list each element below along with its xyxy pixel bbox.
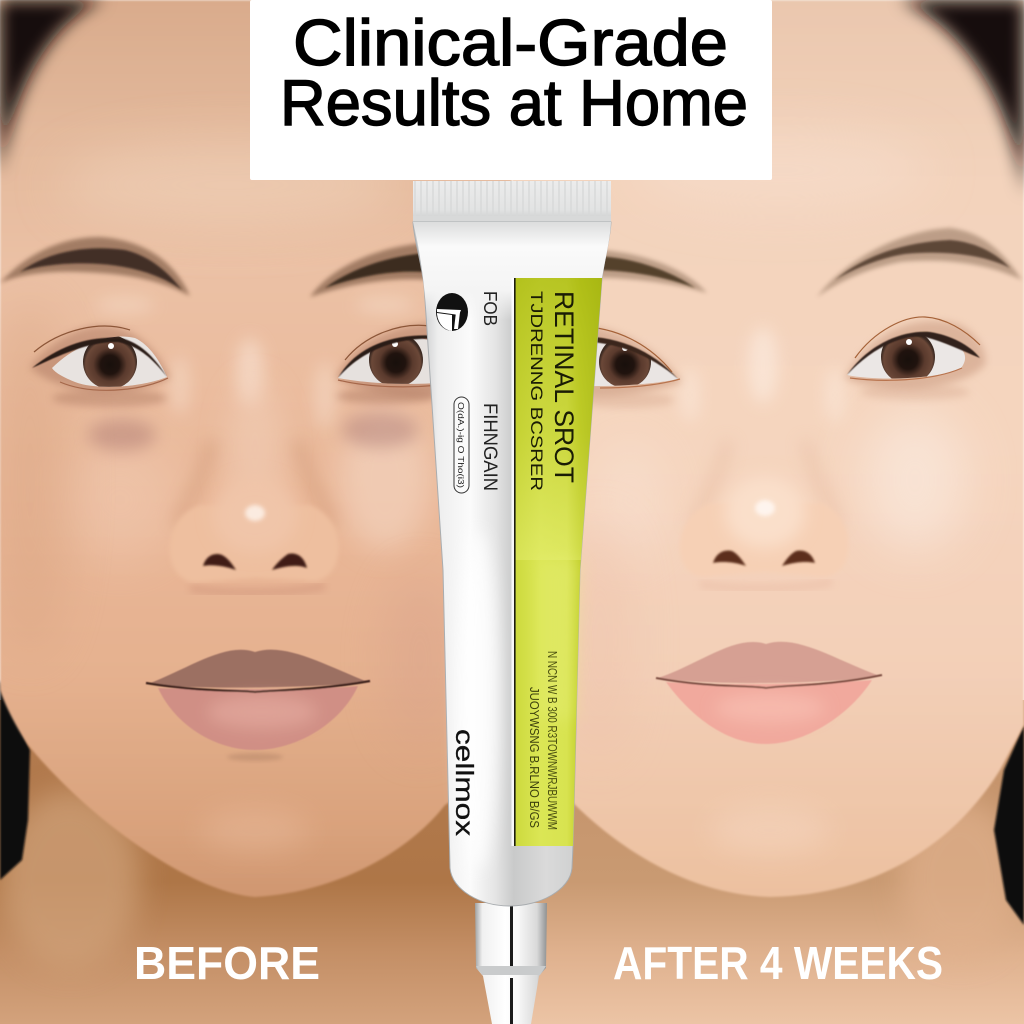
soft under-eye shading	[593, 374, 967, 416]
before hair top	[0, 0, 105, 175]
after neck	[512, 700, 1024, 1024]
nose	[170, 338, 339, 592]
before neck	[0, 700, 512, 1024]
before hair lower	[0, 680, 30, 880]
logo mark	[436, 293, 468, 331]
caption: before: BEFORE	[134, 937, 320, 989]
after face shading	[570, 130, 967, 855]
nose	[680, 327, 849, 588]
tube nozzle	[475, 903, 547, 1024]
left eye	[594, 325, 682, 398]
panel: after face photo	[512, 0, 1024, 1024]
title line 1: Clinical-Grade	[293, 6, 728, 79]
after face shape	[512, 0, 1024, 897]
eyebrow left	[0, 237, 190, 296]
before face shape	[0, 0, 512, 897]
label text: fine print: N NCN W B 300 R3TOWNWRJBUWWM	[545, 651, 560, 830]
right eye	[335, 320, 431, 399]
label text: subtitle: TJDRENNG BCSRER	[527, 291, 546, 491]
dark under-eye circles	[52, 296, 435, 451]
tube text: FOB: FOB	[480, 291, 500, 326]
title panel	[250, 0, 772, 180]
green label	[512, 278, 602, 846]
panel: before face photo	[0, 0, 512, 1024]
before face shading	[0, 143, 455, 852]
tube body	[413, 222, 611, 906]
after hair top	[900, 0, 1024, 195]
right eye	[845, 317, 985, 390]
product tube	[413, 181, 611, 1024]
label text: fine print 2: JUOYWSNG B.RLNO B/GS	[527, 687, 542, 828]
tube badge: O(dA.)-ig O Tho(i3)	[456, 402, 465, 488]
eyebrow right	[817, 228, 1022, 297]
title line 2: Results at Home	[280, 66, 748, 139]
caption: after 4 weeks: AFTER 4 WEEKS	[613, 937, 943, 989]
lips	[146, 650, 370, 750]
label text: product name: RETINAL SROT	[549, 291, 579, 483]
after hair lower	[994, 725, 1024, 925]
left eye	[30, 325, 175, 395]
brand name: cellmox: cellmox	[450, 729, 478, 837]
tube text: FIHNGAIN: FIHNGAIN	[479, 403, 500, 491]
eyebrow left	[602, 248, 706, 294]
eyebrow right	[310, 242, 423, 298]
tube badge	[454, 397, 469, 493]
tube crimped end	[413, 181, 611, 222]
lips	[656, 642, 882, 744]
